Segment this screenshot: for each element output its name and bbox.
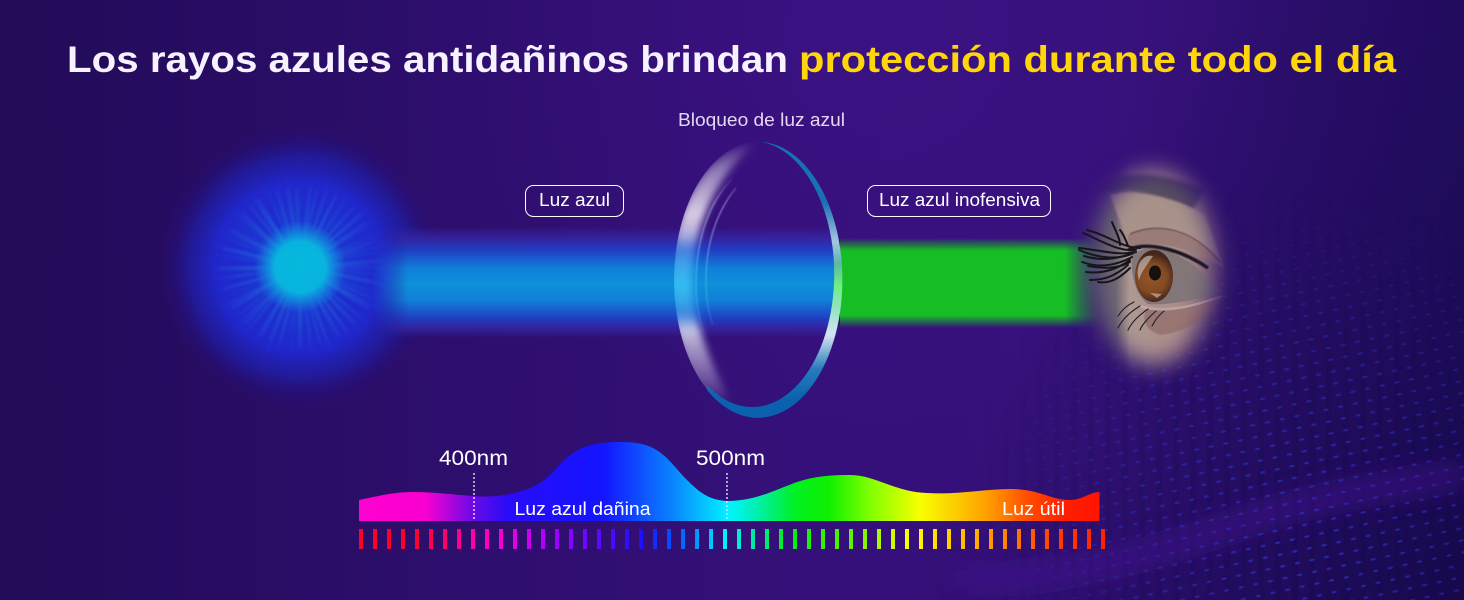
useful light label: Luz útil — [1002, 499, 1065, 519]
lower lashes — [1118, 302, 1164, 330]
label: lens blocking: Bloqueo de luz azul — [678, 109, 845, 130]
lens left highlight — [674, 144, 751, 400]
500nm marker — [696, 447, 765, 521]
blue light beam — [360, 226, 837, 338]
spectrum wave — [359, 442, 1100, 521]
lens inner arcs — [696, 178, 736, 335]
label: blue light — [526, 186, 624, 216]
blue light source glow — [158, 125, 442, 409]
500nm marker: 500nm — [696, 447, 765, 470]
harmful blue light label: Luz azul dañina — [514, 499, 652, 519]
eyelid crease — [1128, 229, 1214, 262]
title: protección durante todo el día — [799, 38, 1397, 80]
upper eyelashes — [1079, 222, 1140, 282]
label: harmless blue light — [868, 186, 1050, 216]
400nm marker — [439, 447, 508, 521]
eyeball — [1132, 248, 1209, 304]
lens outer rim — [707, 142, 842, 418]
title: Los rayos azules antidañinos brindan — [67, 38, 788, 80]
label: blue light: Luz azul — [539, 190, 610, 210]
spectrum wave chart — [359, 442, 1100, 521]
eyebrow — [1112, 172, 1203, 209]
upper eyelid — [1110, 193, 1225, 270]
harmless green beam — [840, 238, 1105, 328]
label: harmless blue light: Luz azul inofensiva — [879, 190, 1041, 210]
eye — [1079, 155, 1231, 381]
iris highlight — [1138, 256, 1153, 280]
upper lash line — [1128, 246, 1208, 268]
iris — [1135, 250, 1173, 302]
spectrum tick bars — [359, 529, 1105, 549]
title — [67, 38, 1397, 80]
pupil — [1149, 266, 1161, 280]
400nm marker: 400nm — [439, 447, 508, 470]
lens — [670, 140, 842, 418]
lower lid — [1144, 302, 1208, 335]
